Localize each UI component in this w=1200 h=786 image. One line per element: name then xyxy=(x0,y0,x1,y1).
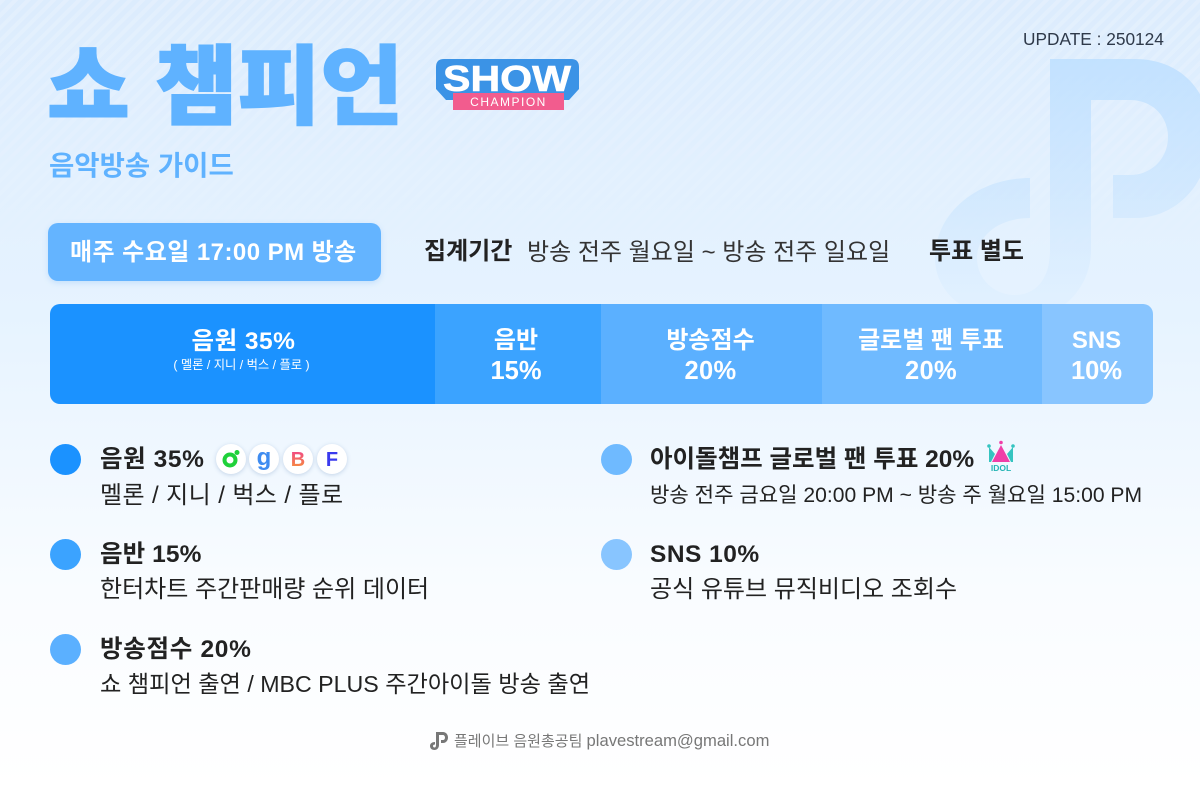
watermark logo xyxy=(935,59,1200,264)
segment: 글로벌 팬 투표: 20% xyxy=(905,357,957,385)
legend: 글로벌 팬 투표 xyxy=(601,444,1142,507)
icon: idol crown xyxy=(987,440,1015,472)
segment: SNS: 10% xyxy=(1071,357,1122,385)
segment: 글로벌 팬 투표 xyxy=(822,304,1042,404)
legend: SNS: SNS 10% xyxy=(650,541,760,568)
background xyxy=(0,0,1200,560)
segment: 음반: 15% xyxy=(490,357,542,385)
icon: melon xyxy=(216,444,246,474)
show champion logo: CHAMPION xyxy=(470,95,547,109)
icon: bugs: B xyxy=(291,449,305,471)
segment: 방송점수 xyxy=(601,304,822,404)
segment: 방송점수: 방송점수 xyxy=(666,327,755,354)
legend: SNS xyxy=(601,539,957,603)
icon: flo: F xyxy=(326,449,338,471)
legend: 방송점수: 방송점수 20% xyxy=(100,636,252,663)
show champion logo xyxy=(436,59,579,110)
segment: 방송점수: 20% xyxy=(685,357,736,385)
segment: SNS xyxy=(1042,304,1153,404)
legend: 음원: 멜론 / 지니 / 벅스 / 플로 xyxy=(100,482,343,509)
broadcast time badge: 매주 수요일 17:00 PM 방송 xyxy=(70,239,357,266)
broadcast time badge xyxy=(48,223,381,281)
legend: 음원 xyxy=(50,444,343,509)
segment: 음원 xyxy=(50,304,435,404)
segment: SNS: SNS xyxy=(1072,327,1121,354)
separate vote note: 투표 별도 xyxy=(929,238,1024,265)
segment: 음원: ( 멜론 / 지니 / 벅스 / 플로 ) xyxy=(173,358,310,372)
footer credit: 플레이브 음원총공팀 plavestream@gmail.com xyxy=(454,731,769,750)
legend: 글로벌 팬 투표: 방송 전주 금요일 20:00 PM ~ 방송 주 월요일 15:00 PM xyxy=(650,484,1142,507)
period label: 집계기간 xyxy=(424,238,512,265)
show champion logo: SHOW xyxy=(443,59,571,99)
legend: SNS: 공식 유튜브 뮤직비디오 조회수 xyxy=(650,576,957,603)
subtitle: 음악방송 가이드 xyxy=(49,150,234,181)
legend: 글로벌 팬 투표: 아이돌챔프 글로벌 팬 투표 20% xyxy=(650,446,974,473)
legend: 음반 xyxy=(50,539,429,603)
segment: 글로벌 팬 투표: 글로벌 팬 투표 xyxy=(858,327,1004,354)
update date: UPDATE : 250124 xyxy=(1023,29,1164,49)
icon: genie: g xyxy=(257,444,271,471)
legend: 음원: 음원 35% xyxy=(100,446,205,473)
legend: 음반: 음반 15% xyxy=(100,541,202,568)
legend: 음반: 한터차트 주간판매량 순위 데이터 xyxy=(100,576,429,603)
segment: 음반 xyxy=(435,304,601,404)
legend: 방송점수 xyxy=(50,634,590,697)
icon: genie xyxy=(249,444,279,474)
icon: bugs xyxy=(283,444,313,474)
icon: flo xyxy=(317,444,347,474)
segment: 음반: 음반 xyxy=(494,327,538,354)
title: 쇼 챔피언 xyxy=(47,40,403,136)
legend: 방송점수: 쇼 챔피언 출연 / MBC PLUS 주간아이돌 방송 출연 xyxy=(100,671,590,697)
segment: 음원: 음원 35% xyxy=(192,328,295,355)
period text: 방송 전주 월요일 ~ 방송 전주 일요일 xyxy=(527,239,890,266)
